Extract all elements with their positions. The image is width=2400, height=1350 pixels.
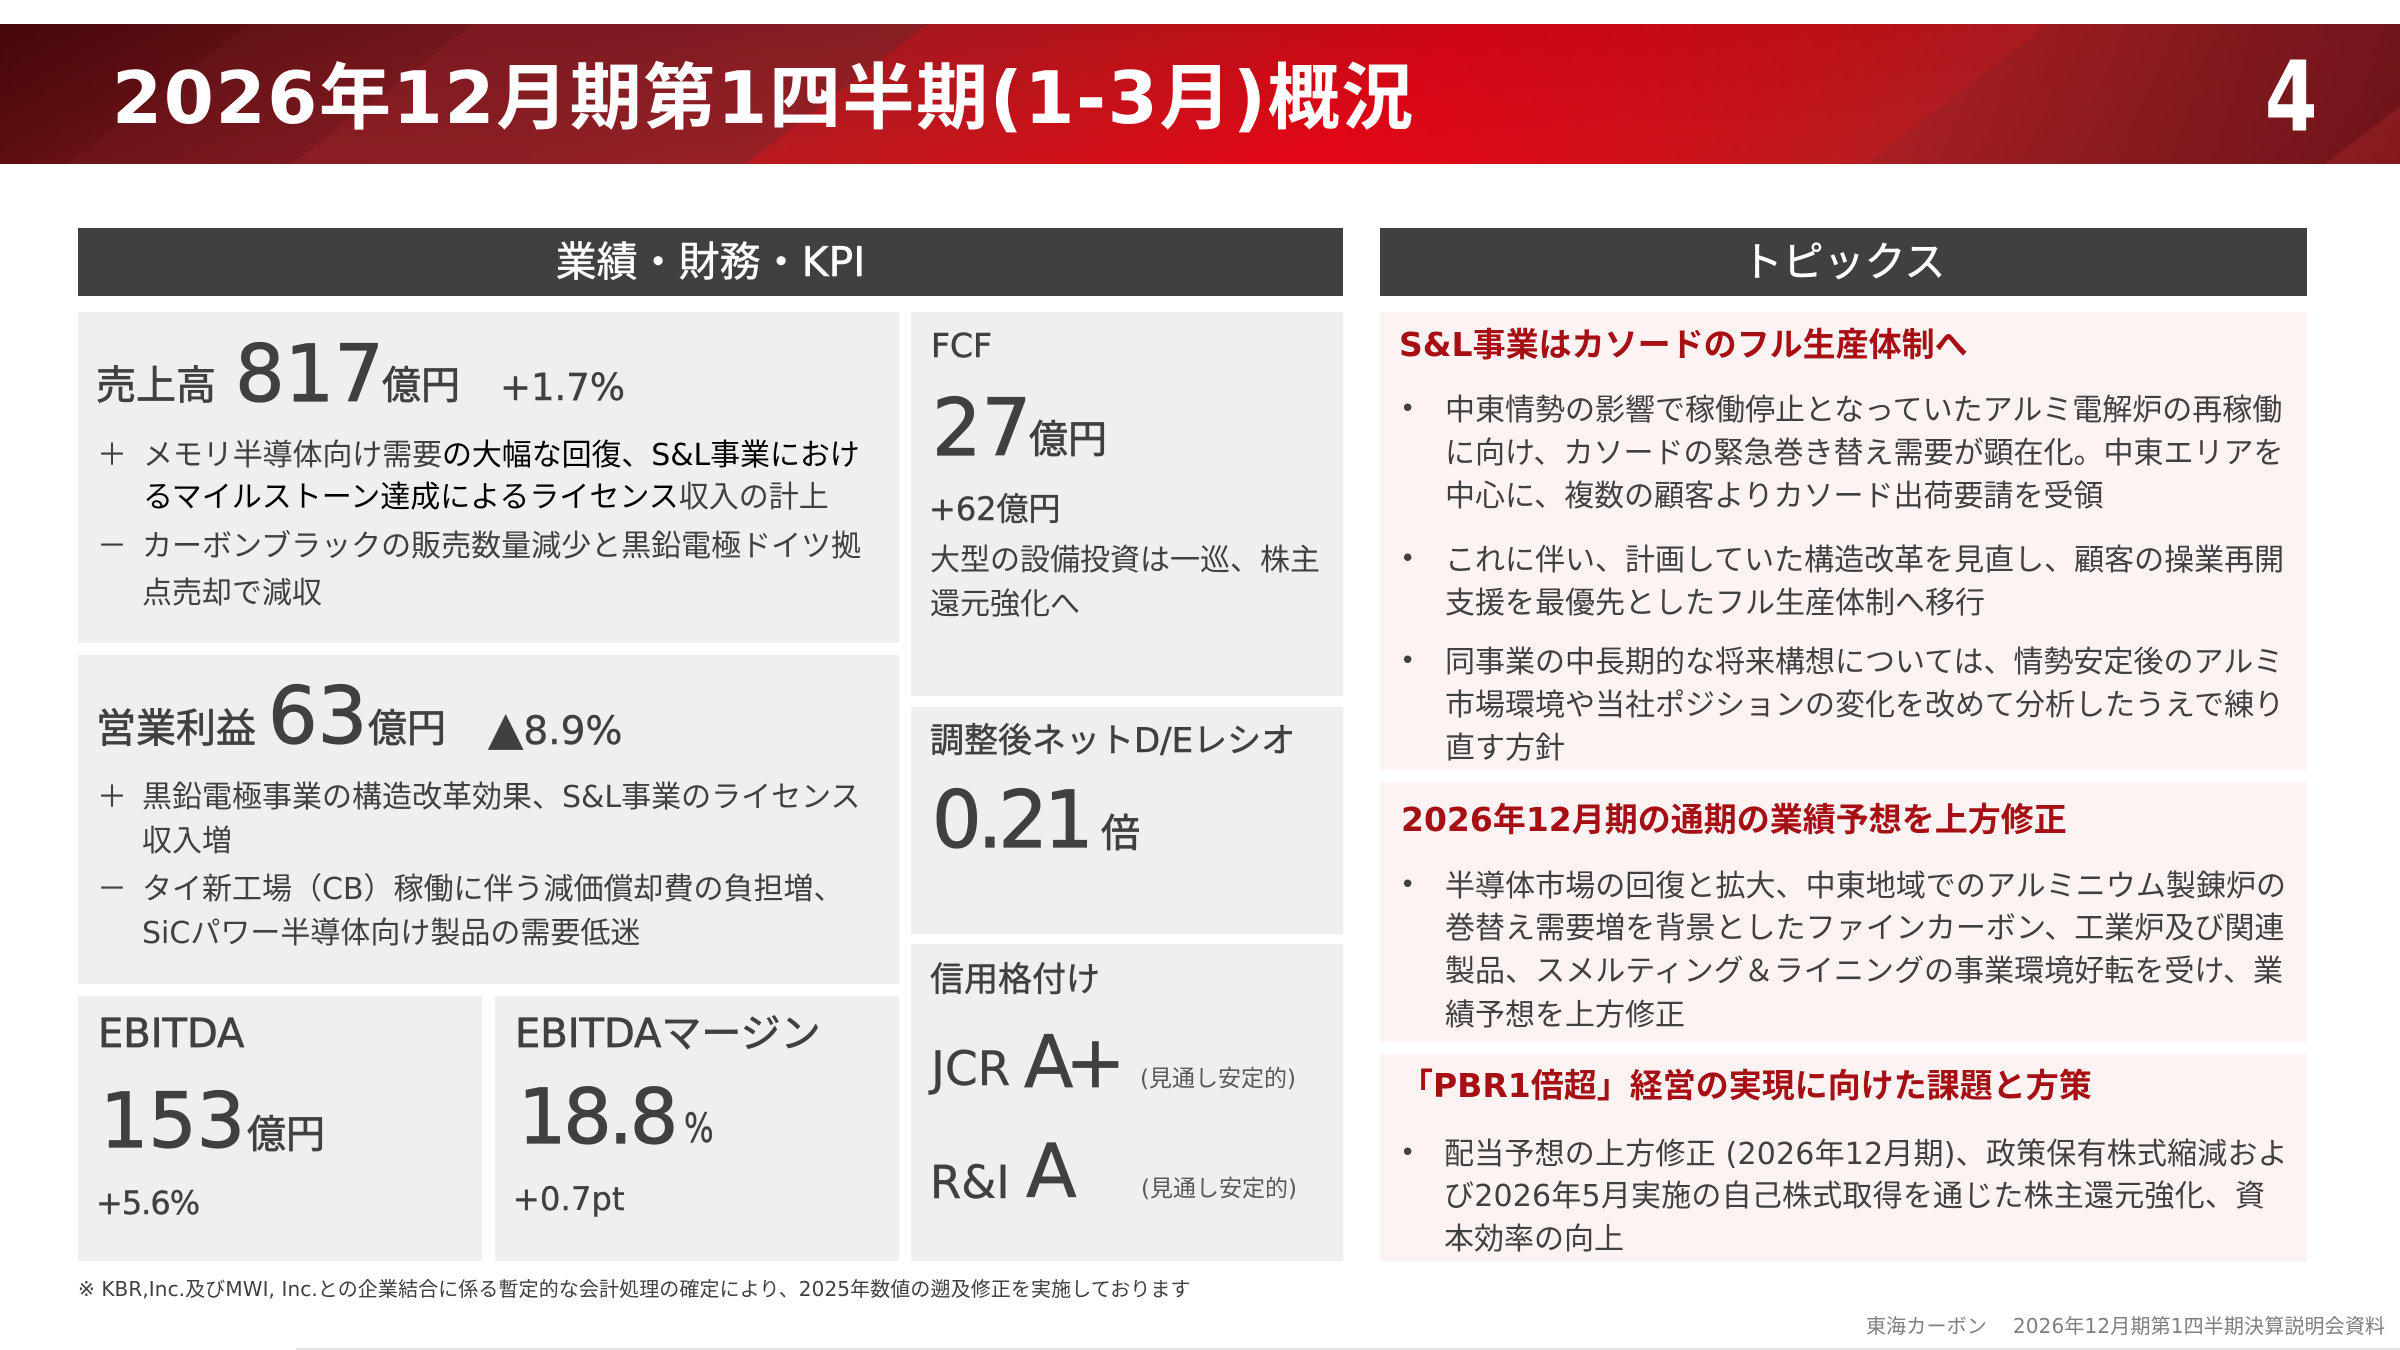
- rating: R&I: R&I: [930, 1156, 1010, 1209]
- panel: topic S&L事業: [1380, 312, 2307, 770]
- minus factors: カーボンブラックの販売数量減少と黒鉛電極ドイツ拠: [142, 529, 861, 564]
- minus factors: SiCパワー半導体向け製品の需要低迷: [142, 916, 640, 951]
- value: 817: 817: [235, 330, 384, 420]
- unit: 億円: 億円: [368, 707, 446, 752]
- minus factors: [97, 872, 844, 951]
- value: 63: 63: [268, 672, 367, 762]
- plus factors: ＋: [97, 780, 127, 815]
- bullet 1: 中東情勢の影響で稼働停止となっていたアルミ電解炉の再稼働: [1445, 393, 2282, 428]
- label: EBITDAマージン: EBITDAマージン: [515, 1011, 821, 1057]
- topic heading: S&L事業はカソードのフル生産体制へ: [1399, 325, 1968, 364]
- bullet 2: 支援を最優先としたフル生産体制へ移行: [1445, 586, 1985, 621]
- bullet: •: [1400, 1138, 1415, 1168]
- panel: topic 業績予想: [1380, 782, 2307, 1042]
- bullet 1: •: [1400, 394, 1415, 424]
- plus factors: ＋: [97, 438, 127, 473]
- label: 売上高: 売上高: [96, 363, 216, 409]
- unit: %: %: [684, 1106, 714, 1152]
- unit: 倍: 倍: [1101, 812, 1140, 857]
- unit: 億円: 億円: [1029, 418, 1107, 463]
- plus factors: [97, 438, 860, 515]
- plus factors: 黒鉛電極事業の構造改革効果、S&L事業のライセンス: [142, 780, 861, 815]
- plus factors: るマイルストーン達成によるライセンス収入の計上: [143, 480, 829, 515]
- panel: FCF: [911, 312, 1343, 696]
- panel: EBITDA: [78, 996, 482, 1261]
- change: +0.7pt: +0.7pt: [513, 1180, 625, 1218]
- section header: トピックス: トピックス: [1742, 238, 1945, 286]
- bullet: び2026年5月実施の自己株式取得を通じた株主還元強化、資: [1444, 1179, 2265, 1214]
- title banner: [0, 24, 2400, 164]
- section header: 業績・財務・KPI: [78, 228, 1343, 296]
- bullet 1: に向け、カソードの緊急巻き替え需要が顕在化。中東エリアを: [1445, 436, 2284, 471]
- plus factors: [97, 780, 861, 859]
- label: EBITDA: EBITDA: [98, 1011, 244, 1057]
- page number: 4: [2265, 40, 2318, 154]
- value: 0.21: 0.21: [932, 776, 1090, 866]
- value: 18.8: 18.8: [518, 1072, 675, 1161]
- bullet: 製品、スメルティング＆ライニングの事業環境好転を受け、業: [1445, 954, 2283, 989]
- plus factors: 収入増: [142, 824, 232, 859]
- footnote: ※ KBR,Inc.及びMWI, Inc.との企業結合に係る暫定的な会計処理の確定により、2025年数値の遡及修正を実施しております: [78, 1277, 1191, 1301]
- plus factors: メモリ半導体向け需要の大幅な回復、S&L事業におけ: [143, 438, 860, 473]
- label: FCF: FCF: [931, 326, 992, 365]
- description: 大型の設備投資は一巡、株主: [930, 543, 1320, 578]
- label: 調整後ネットD/Eレシオ: 調整後ネットD/Eレシオ: [930, 721, 1295, 761]
- rating: JCR: A+: [1024, 1020, 1118, 1104]
- panel: 信用格付け: [911, 944, 1343, 1261]
- footer text: 東海カーボン 2026年12月期第1四半期決算説明会資料: [1866, 1314, 2385, 1338]
- panel: 売上高: [78, 312, 899, 643]
- topic heading: 「PBR1倍超」経営の実現に向けた課題と方策: [1400, 1066, 2092, 1105]
- value: 27: 27: [932, 384, 1031, 474]
- minus factors: －: [97, 872, 127, 907]
- bullet 1: [1400, 393, 2284, 514]
- bullet 2: これに伴い、計画していた構造改革を見直し、顧客の操業再開: [1445, 543, 2284, 578]
- label: 信用格付け: 信用格付け: [930, 960, 1100, 1000]
- panel: topic PBR: [1380, 1054, 2307, 1262]
- panel: EBITDAマージン: [495, 996, 899, 1261]
- bullet 3: 直す方針: [1445, 731, 1565, 766]
- bullet 3: •: [1400, 646, 1415, 676]
- bullet: 半導体市場の回復と拡大、中東地域でのアルミニウム製錬炉の: [1445, 869, 2286, 904]
- bullet: 績予想を上方修正: [1445, 998, 1685, 1033]
- bullet 3: 市場環境や当社ポジションの変化を改めて分析したうえで練り: [1445, 688, 2284, 723]
- bullet: 巻替え需要増を背景としたファインカーボン、工業炉及び関連: [1445, 911, 2285, 946]
- bullet 3: 同事業の中長期的な将来構想については、情勢安定後のアルミ: [1445, 645, 2283, 680]
- section header: トピックス: [1380, 228, 2307, 296]
- bullet: 本効率の向上: [1444, 1222, 1624, 1257]
- bullet 3: [1400, 645, 2284, 766]
- bullet: [1400, 869, 2286, 1033]
- minus factors: 点売却で減収: [142, 576, 322, 611]
- bullet: •: [1400, 870, 1415, 900]
- panel: 調整後ネットD/Eレシオ: [911, 707, 1343, 934]
- change: +62億円: +62億円: [929, 490, 1061, 528]
- rating: R&I: (見通し安定的): [1141, 1176, 1297, 1202]
- rating: R&I: [930, 1129, 1297, 1215]
- change: +5.6%: +5.6%: [96, 1184, 199, 1222]
- unit: 億円: 億円: [247, 1113, 325, 1158]
- description: [930, 543, 1320, 622]
- bullet: 配当予想の上方修正 (2026年12月期)、政策保有株式縮減およ: [1444, 1137, 2288, 1172]
- rating: JCR: [928, 1020, 1296, 1104]
- minus factors: －: [97, 529, 127, 564]
- bullet 2: •: [1400, 544, 1415, 574]
- rating: R&I: A: [1026, 1129, 1077, 1215]
- change: +1.7%: +1.7%: [500, 366, 625, 409]
- section header: 業績・財務・KPI: 業績・財務・KPI: [556, 238, 865, 286]
- bullet 1: 中心に、複数の顧客よりカソード出荷要請を受領: [1445, 479, 2104, 514]
- title text: 2026年12月期第1四半期(1-3月)概況: [112, 56, 1415, 140]
- panel: 営業利益: [78, 655, 899, 984]
- label: 営業利益: 営業利益: [96, 706, 256, 752]
- minus factors: [97, 529, 861, 611]
- bullet: [1400, 1137, 2288, 1257]
- topic heading: 2026年12月期の通期の業績予想を上方修正: [1401, 800, 2067, 839]
- description: 還元強化へ: [930, 587, 1080, 622]
- minus factors: タイ新工場（CB）稼働に伴う減価償却費の負担増、: [142, 872, 844, 907]
- bullet 2: [1400, 543, 2284, 621]
- rating: JCR: JCR: [931, 1042, 1010, 1097]
- change: ▲8.9%: ▲8.9%: [488, 701, 622, 755]
- value: 153: 153: [100, 1076, 245, 1165]
- unit: 億円: 億円: [382, 364, 460, 409]
- rating: JCR: (見通し安定的): [1140, 1066, 1296, 1092]
